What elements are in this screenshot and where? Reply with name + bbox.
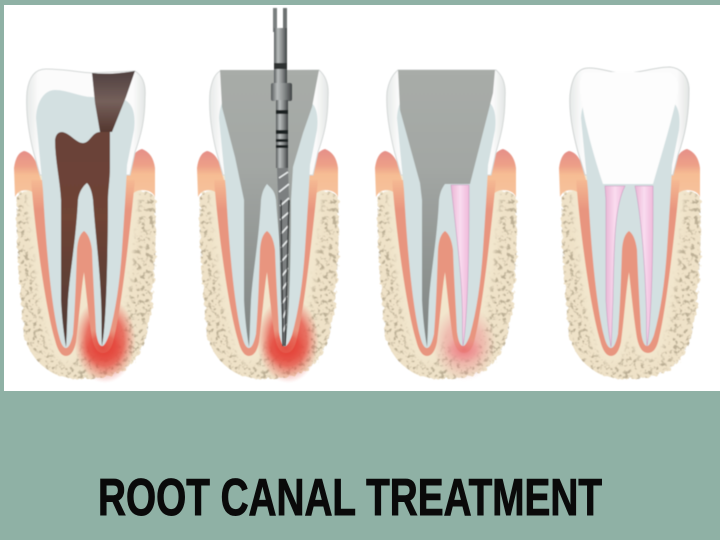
tooth 1: decayed tooth with infected pulp: [10, 69, 160, 385]
dentin: [397, 90, 496, 348]
opened chamber and left canal: [398, 70, 495, 347]
gum ligament: [576, 180, 680, 356]
enamel crown: [387, 70, 505, 175]
file handle prongs: [273, 8, 277, 32]
tooth 4: restored tooth with new crown: [555, 67, 705, 385]
cavity: [92, 71, 135, 132]
infection glow: [74, 297, 136, 383]
dentin: [36, 90, 135, 348]
enamel crown: [27, 69, 145, 175]
endodontic file instrument: [271, 8, 292, 346]
opened pulp chamber: [220, 70, 319, 347]
tooth 3: one canal filled: [371, 70, 521, 385]
white crown core: [580, 72, 678, 184]
gum ligament: [392, 180, 496, 356]
pulp chamber and canals: [55, 132, 110, 347]
right pink canal: [635, 186, 653, 346]
stopper: [271, 83, 292, 101]
dentin: [219, 90, 318, 348]
mild inflammation: [432, 305, 496, 381]
left pink canal: [605, 186, 625, 347]
tooth 2: canal cleaned with file: [193, 70, 343, 385]
spiral file tip: [277, 168, 289, 346]
pink canal filling: [451, 185, 469, 346]
gum ligament: [31, 180, 135, 356]
file upper body: [274, 28, 287, 83]
gum ligament: [214, 180, 318, 356]
crown: [570, 67, 689, 175]
dentin: [581, 90, 680, 348]
infection glow: [257, 297, 319, 383]
file shank: [276, 100, 288, 168]
enamel crown: [210, 70, 328, 175]
white image panel: [4, 5, 720, 391]
